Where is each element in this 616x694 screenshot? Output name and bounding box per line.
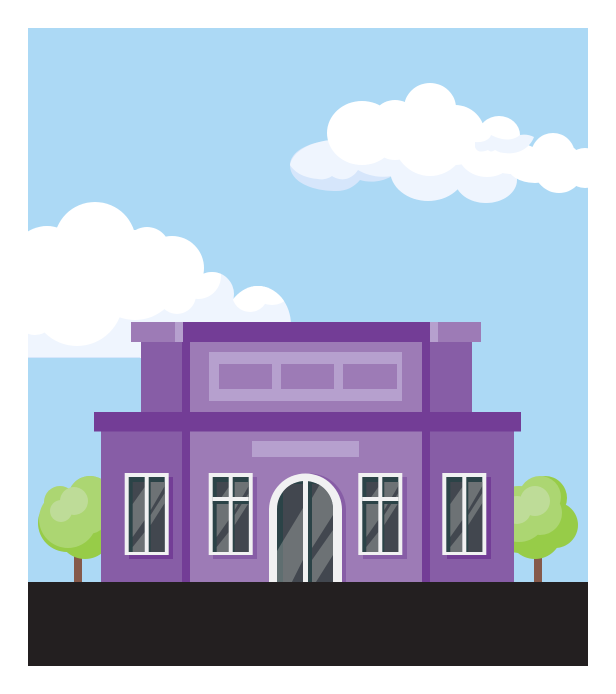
- window: centre right: [358, 473, 402, 555]
- foliage highlight: [50, 487, 88, 522]
- upper storey side wings: [141, 342, 472, 412]
- cloud shadow: [290, 142, 392, 191]
- foliage dark: [38, 476, 125, 559]
- lower storey centre: [190, 431, 422, 582]
- door glass base: [277, 481, 333, 582]
- building: [94, 322, 521, 582]
- ledge: [94, 412, 521, 432]
- tree: left: [38, 476, 125, 582]
- cloud white crest: [196, 272, 221, 299]
- upper storey centre: [190, 342, 422, 412]
- foliage light: [491, 476, 562, 542]
- cloud: upper right: [290, 83, 605, 203]
- cloud light underside: [391, 160, 517, 203]
- tree: right: [491, 476, 578, 582]
- window: centre left: [209, 473, 253, 555]
- cloud white body: [327, 83, 605, 193]
- ground: [28, 582, 588, 666]
- lower storey side walls: [101, 431, 514, 582]
- door mullion: [303, 481, 308, 582]
- cloud white body: [11, 202, 204, 346]
- trunk: [74, 555, 82, 582]
- left door leaf: [277, 484, 303, 582]
- cloud light patch: [475, 135, 534, 153]
- foliage highlight: [503, 486, 550, 524]
- lower storey columns: [182, 431, 430, 582]
- cloud light base: [28, 272, 291, 364]
- door shadow: [273, 474, 346, 582]
- upper storey columns: [182, 342, 430, 412]
- small cloud white tops: [233, 286, 284, 312]
- window: far right: [442, 473, 486, 555]
- sign plate: [252, 441, 359, 457]
- door: [269, 474, 346, 582]
- upper window band: [209, 352, 402, 401]
- window shadows: [129, 477, 491, 559]
- window: far left: [125, 473, 169, 555]
- cloud light left lobe: [290, 140, 395, 179]
- trunk: [534, 555, 542, 582]
- cloud: lower left: [28, 202, 291, 358]
- right door leaf: [312, 484, 333, 582]
- roof: [131, 322, 481, 342]
- door frame: [269, 474, 342, 582]
- sky background: [28, 28, 588, 582]
- shaded line below cloud: [28, 357, 140, 358]
- foliage light: [39, 476, 112, 548]
- foliage dark: [492, 476, 578, 559]
